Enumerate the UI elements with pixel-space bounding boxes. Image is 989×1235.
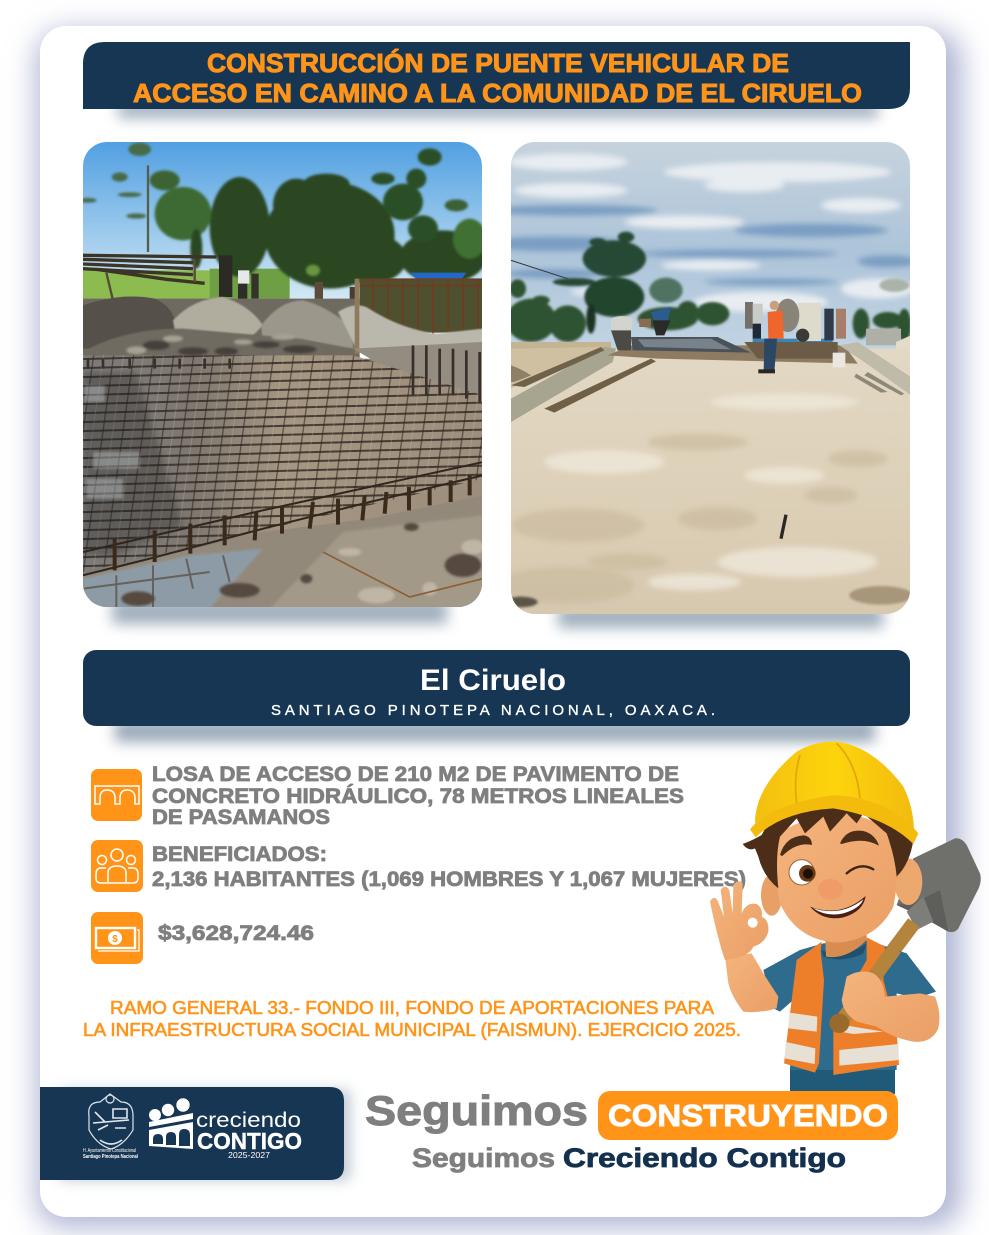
photo: rebar grid at construction site xyxy=(79,142,486,609)
icon: group of people xyxy=(91,840,143,892)
title text: CONSTRUCCIÓN DE PUENTE VEHICULAR DE xyxy=(207,48,789,78)
icon: banknotes xyxy=(91,912,143,964)
eyebrows xyxy=(780,831,879,856)
icon: banknotes: $ xyxy=(112,934,118,945)
title banner xyxy=(83,42,910,109)
project scope item xyxy=(91,763,684,829)
title text: ACCESO EN CAMINO A LA COMUNIDAD DE EL CIRUELO xyxy=(133,78,862,108)
orange badge: construyendo xyxy=(598,1091,898,1140)
beneficiaries text: 2,136 HABITANTES (1,069 HOMBRES Y 1,067 MUJERES) xyxy=(152,868,746,891)
raised arm with ok hand xyxy=(710,881,778,1012)
municipal logo panel xyxy=(40,1087,344,1180)
municipal coat of arms: Santiago Pinotepa Nacional xyxy=(83,1154,138,1160)
location banner xyxy=(83,650,910,726)
scope text: LOSA DE ACCESO DE 210 M2 DE PAVIMENTO DE xyxy=(152,763,679,786)
scope text xyxy=(152,763,684,829)
neck xyxy=(825,933,867,957)
creciendo contigo logo: 2025-2027 xyxy=(228,1151,271,1160)
illustration: construction worker boy with shovel xyxy=(710,742,981,1094)
pants xyxy=(790,1067,895,1094)
scope text: DE PASAMANOS xyxy=(152,806,330,829)
slogan subline: Creciendo Contigo xyxy=(563,1143,846,1173)
shovel xyxy=(843,838,981,1017)
icon: bridge xyxy=(91,769,142,821)
slogan heading: Seguimos xyxy=(365,1087,588,1134)
location name: El Ciruelo xyxy=(420,664,566,697)
creciendo contigo logo: creciendo xyxy=(196,1109,301,1132)
beneficiaries text: BENEFICIADOS: xyxy=(152,843,327,866)
face xyxy=(775,813,898,943)
municipal coat of arms: H. Ayuntamiento Constitucional xyxy=(83,1148,136,1154)
municipal coat of arms xyxy=(83,1094,138,1160)
slogan subline: Seguimos xyxy=(412,1143,555,1173)
beneficiaries text xyxy=(152,843,746,891)
slogan subline xyxy=(412,1143,846,1173)
investment item xyxy=(91,912,314,964)
hard hat xyxy=(750,742,918,844)
smile xyxy=(810,896,866,918)
location subtitle: SANTIAGO PINOTEPA NACIONAL, OAXACA. xyxy=(271,702,715,719)
hair xyxy=(743,802,913,888)
nose xyxy=(818,879,843,900)
funding source text: LA INFRAESTRUCTURA SOCIAL MUNICIPAL (FAISMUN). EJERCICIO 2025. xyxy=(83,1020,741,1040)
orange badge: construyendo: CONSTRUYENDO xyxy=(608,1098,888,1133)
creciendo contigo logo: CONTIGO xyxy=(197,1128,302,1154)
soft shadows beneath panels xyxy=(60,102,883,1180)
open eye xyxy=(789,860,816,885)
title text xyxy=(133,48,862,108)
investment amount: $3,628,724.46 xyxy=(158,922,314,945)
creciendo contigo logo xyxy=(149,1098,302,1160)
photo: pouring concrete on the bridge deck xyxy=(511,142,910,614)
ears xyxy=(761,858,922,916)
scope text: CONCRETO HIDRÁULICO, 78 METROS LINEALES xyxy=(152,785,684,808)
mixer and workers detail xyxy=(611,299,846,373)
winking eye xyxy=(847,866,873,873)
gripping arm and hand xyxy=(842,971,939,1042)
beneficiaries item xyxy=(91,840,746,892)
shovel handle over vest xyxy=(829,948,895,1033)
hi-vis vest xyxy=(784,937,899,1075)
shirt xyxy=(763,940,936,1070)
funding source text: RAMO GENERAL 33.- FONDO III, FONDO DE APORTACIONES PARA xyxy=(110,998,714,1018)
funding source text xyxy=(83,998,741,1040)
